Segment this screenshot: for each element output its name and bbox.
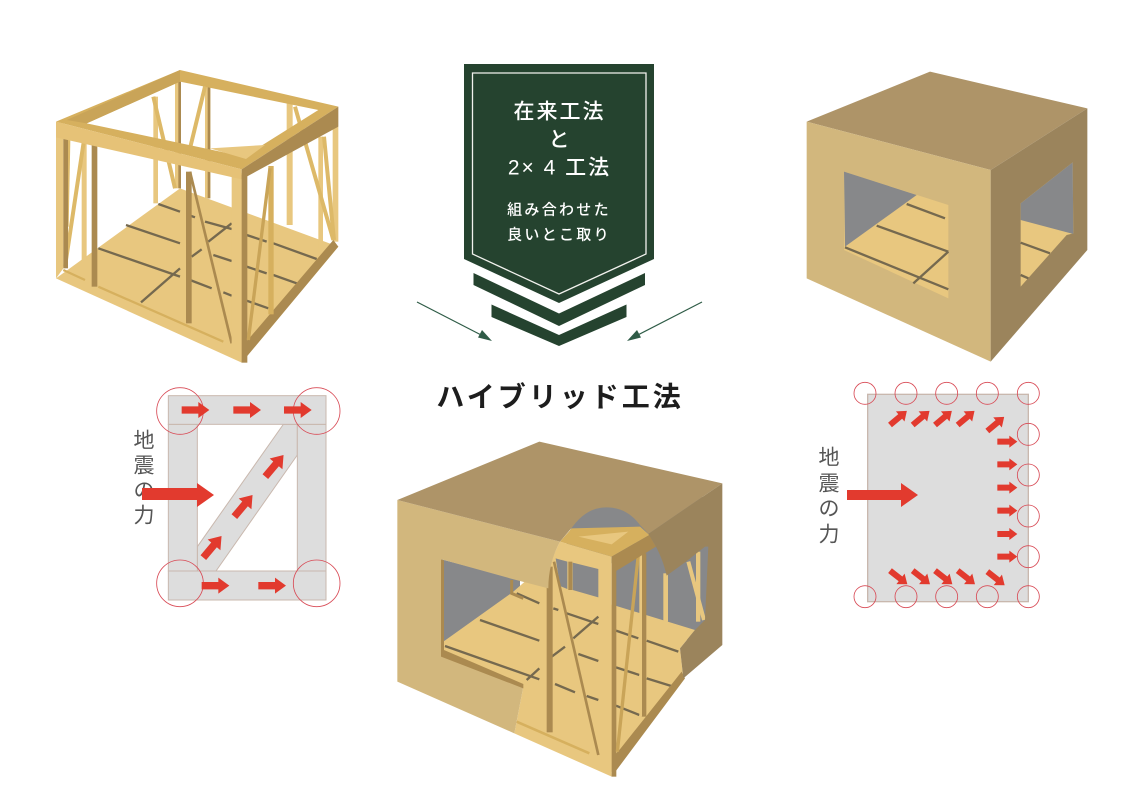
- label: seismic force, left: [134, 430, 154, 528]
- right frame: [612, 672, 685, 777]
- illustration: conventional timber frame cube: [56, 70, 338, 363]
- window inner posts: [512, 580, 523, 598]
- label: seismic force, right: の: [818, 498, 840, 520]
- joint circles: [157, 388, 340, 607]
- panel: [868, 394, 1028, 602]
- diagram: frame under seismic force: [157, 388, 340, 607]
- arrow: seismic force, left: [142, 483, 214, 507]
- label: seismic force, right: 震: [818, 472, 840, 496]
- frame front face: [514, 542, 612, 777]
- badge: green shield with method names: [464, 64, 654, 303]
- label: seismic force, left: 地: [134, 430, 154, 452]
- frame members: [168, 396, 326, 600]
- badge heading: two construction methods: と: [548, 128, 570, 152]
- title: hybrid method: ハイブリッド工法: [436, 380, 684, 412]
- interior gray: [555, 497, 713, 643]
- panels: [397, 500, 560, 733]
- joint circles: [854, 382, 1039, 608]
- label: seismic force, left: 震: [134, 454, 154, 478]
- badge subtext: [507, 202, 611, 244]
- label: seismic force, right: 力: [818, 524, 840, 546]
- corner beams: [560, 527, 649, 557]
- chevrons below the badge: [474, 273, 645, 346]
- badge heading: two construction methods: 在来工法: [514, 100, 606, 124]
- label: seismic force, left: の: [134, 480, 154, 502]
- illustration: 2x4 panel wall cube: [807, 72, 1087, 362]
- badge subtext: 良いとこ取り: [507, 226, 611, 244]
- badge heading: two construction methods: [508, 100, 611, 180]
- badge heading: two construction methods: 2× 4 工法: [508, 156, 611, 180]
- label: seismic force, right: [818, 446, 840, 546]
- illustration: hybrid cube with cutaway: [397, 442, 722, 777]
- arrow: from left toward centre: [417, 302, 492, 341]
- force flow arrows: [182, 402, 312, 594]
- force flow arrows: [886, 406, 1017, 590]
- label: seismic force, right: 地: [818, 446, 840, 470]
- floor: [442, 580, 695, 773]
- label: seismic force, left: 力: [134, 504, 154, 528]
- arrow: from right toward centre: [627, 302, 702, 341]
- arrow: seismic force, right: [847, 483, 918, 507]
- badge subtext: 組み合わせた: [507, 202, 611, 218]
- diagram: panel under seismic force: [854, 382, 1039, 608]
